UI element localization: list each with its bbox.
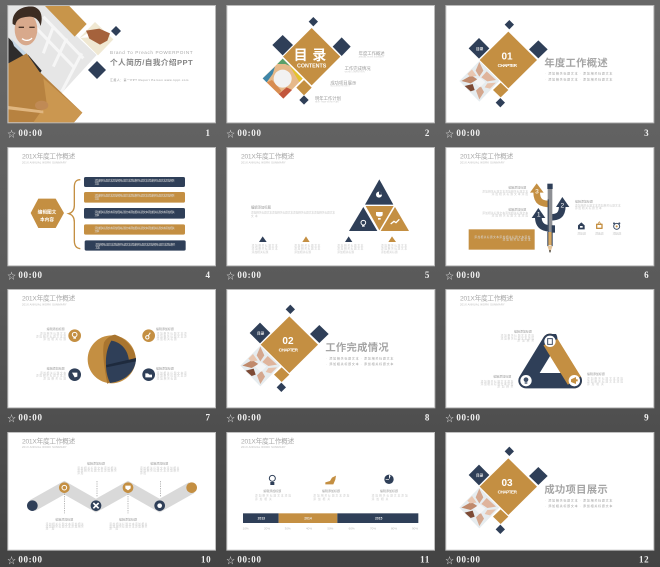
text blocks: 添加相关标题文本添 <box>157 332 187 336</box>
footer: 00:00 <box>237 413 262 423</box>
cover photo: businessman <box>8 6 97 122</box>
small triangles with captions: 添加相关标题文本 <box>252 243 278 247</box>
text blocks: 添加相关标题文本 <box>40 332 66 336</box>
triangle cluster <box>349 179 409 231</box>
gold contents diamond <box>283 28 340 85</box>
footer <box>445 270 649 281</box>
chapter diamonds <box>459 20 548 107</box>
chapter title <box>544 56 612 81</box>
footer: 11 <box>420 555 430 565</box>
arrows around pencil: 3 <box>535 189 539 196</box>
percent scale: 90% <box>412 526 418 530</box>
footer: 7 <box>205 413 211 423</box>
icon circles <box>68 329 155 381</box>
footer: 00:00 <box>456 128 481 138</box>
bars: 添加相关标题文本添加相关标题文本添加相关标题文本添加相关标题文本添加相关 <box>95 179 175 183</box>
footer <box>226 270 430 281</box>
text blocks: 添加相关标题文本添加 <box>501 336 534 340</box>
bars: 添加相关标题文本添加相关标题文本添加相关标题文本添加相关标题文本添加相关 <box>95 226 175 230</box>
dashed connectors <box>64 481 160 513</box>
text blocks: 编辑添加标题 <box>508 184 526 189</box>
text blocks: 添加相关标题文本添 <box>36 374 66 378</box>
heading <box>22 436 76 449</box>
arrows around pencil: 1 <box>537 212 541 219</box>
chapter title: 工作完成情况 <box>325 341 389 354</box>
footer <box>226 555 430 566</box>
footer <box>445 128 649 139</box>
contents list: 明年工作计划 <box>315 95 341 102</box>
chapter diamonds: 01 <box>501 51 513 62</box>
text blocks: 添加相关标题文本添加相关标题文本 <box>482 189 528 193</box>
brace <box>69 180 80 249</box>
footer: ☆ <box>445 556 454 566</box>
gold top diamond <box>45 6 87 37</box>
panel: slide 1 cover <box>7 5 216 139</box>
text blocks: 编辑添加标题 <box>575 199 593 204</box>
handshake photo <box>80 22 113 55</box>
footer: 12 <box>639 555 649 565</box>
text blocks: 添加相关标题文本添加相关 <box>109 522 148 526</box>
small triangles with captions: 添加相关标题 <box>337 250 354 254</box>
footer: 00:00 <box>456 413 481 423</box>
footer <box>7 413 211 424</box>
hexagon: 编辑图文 <box>38 209 57 216</box>
text blocks: 添加 <box>46 527 55 531</box>
text blocks: 添加相关标题文本添加相关 <box>140 469 180 473</box>
chapter title: · 添加相关标题文本 <box>361 355 393 360</box>
panel: slide 9 looped triangle <box>445 289 654 424</box>
text blocks <box>36 326 187 380</box>
small triangles with captions: 添加相关标题文本 <box>294 247 321 251</box>
footer: 2 <box>425 128 430 138</box>
year bar: 2014 <box>304 516 312 520</box>
text blocks: 添加相关标题 <box>43 376 66 380</box>
small triangles with captions <box>252 236 407 254</box>
footer: 00:00 <box>18 128 43 138</box>
captions <box>255 488 408 501</box>
footer <box>226 128 430 139</box>
year bar: 2015 <box>375 516 383 520</box>
bars: 添加相关标题文本添加相关标题文本添加相关标题文本添加相关标题文本添加相关 <box>95 242 176 246</box>
chapter diamonds: 目录 <box>476 473 484 478</box>
chapter diamonds: CHAPTER <box>498 63 518 68</box>
footer: ☆ <box>7 556 16 566</box>
chapter diamonds: 目录 <box>257 331 265 336</box>
captions: 编辑添加标题 <box>380 488 398 493</box>
footer: 00:00 <box>237 270 262 280</box>
sphere chart <box>88 335 136 384</box>
heading: 201X ANNUAL WORK SUMMARY <box>22 161 67 165</box>
footer <box>445 555 649 566</box>
gold text box: 添加相关标题文本 <box>503 238 531 242</box>
hexagon: 本内容 <box>40 216 54 223</box>
text blocks: 添加相关标题文本添 <box>36 334 66 338</box>
small triangles with captions: 添加相关标题 <box>252 250 269 254</box>
pencils photo <box>263 59 303 99</box>
text blocks: 添加相关标题文本添加 <box>492 214 528 218</box>
heading <box>22 294 76 307</box>
chapter diamonds: 目录 <box>476 46 484 51</box>
panel: slide 3 chapter 01 <box>445 5 654 139</box>
chapter title: 成功项目展示 <box>544 483 608 496</box>
bars: 添加相关标题文本添加相关标题文本添加相关标题文本添加相关标题文本添加相关 <box>95 194 175 198</box>
footer: 8 <box>425 413 430 423</box>
text block <box>251 204 335 218</box>
small triangles with captions: 添加相关标题文本 <box>337 247 364 251</box>
footer <box>7 555 211 566</box>
heading: 201X年度工作概述 <box>22 436 76 445</box>
panel: slide 11 year bar <box>226 432 435 566</box>
percent scale: 30% <box>285 526 291 530</box>
text blocks: 编辑添加标题 <box>587 371 605 376</box>
footer <box>7 270 211 281</box>
small triangles with captions: 添加相关标题文本 <box>294 243 321 247</box>
text blocks: 添加相关 <box>587 382 604 386</box>
footer: 00:00 <box>456 555 481 565</box>
footer: 1 <box>205 128 211 138</box>
contents list: 工作完成情况 <box>345 65 371 72</box>
footer: 00:00 <box>18 413 43 423</box>
small triangles with captions: 添加相关标题文本 <box>252 247 278 251</box>
heading <box>460 152 514 165</box>
heading: 201X年度工作概述 <box>460 152 514 161</box>
text blocks: 添加相关标题文本 <box>575 206 602 210</box>
text blocks: 编辑添加标题 <box>514 328 532 333</box>
contents list: NEXT YEAR WORK PLAN <box>315 100 339 103</box>
chapter title: · 添加相关标题文本 <box>545 71 578 76</box>
text blocks <box>482 184 621 218</box>
contents list: 成功项目展示 <box>330 79 357 86</box>
footer: ☆ <box>226 556 235 566</box>
text blocks: 添加相关标题 <box>157 376 177 380</box>
arrows around pencil: 2 <box>560 202 564 209</box>
chapter title: 年度工作概述 <box>544 56 608 69</box>
footer: 9 <box>644 413 649 423</box>
text blocks: 添加相关标题文本添加相关 <box>77 466 117 470</box>
text blocks: 添加相关标题文本添 <box>157 371 187 375</box>
percent scale: 60% <box>349 526 355 530</box>
bars <box>84 177 186 251</box>
heading: 201X ANNUAL WORK SUMMARY <box>241 445 286 449</box>
text blocks: 添加相关标题文本添加 <box>501 334 534 338</box>
text blocks: 添加相关 <box>497 384 514 388</box>
captions: 添加相关标题文本添加 <box>372 494 408 498</box>
captions: 添加相关 <box>372 497 389 501</box>
text blocks: 编辑添加标题 <box>47 365 65 370</box>
icons row: 添加标题 <box>613 232 622 236</box>
text blocks: 添加 <box>109 527 118 531</box>
text blocks: 编辑添加标题 <box>493 374 511 379</box>
heading: 201X年度工作概述 <box>22 294 76 303</box>
text blocks: 编辑添加标题 <box>87 461 105 466</box>
text blocks: 添加相关标题文本添加相关标题文本 <box>575 203 621 207</box>
panel: slide 12 chapter 03 <box>445 432 654 566</box>
footer <box>7 128 211 139</box>
chapter title: · 添加相关标题文本 <box>545 503 578 508</box>
chapter title: · 添加相关标题文本 <box>361 361 393 366</box>
text blocks: 编辑添加标题 <box>55 516 73 521</box>
heading <box>460 294 514 307</box>
captions: 添加相关 <box>255 497 272 501</box>
icons <box>269 475 394 485</box>
text blocks: 添加相关标题文本添加相关 <box>77 469 117 473</box>
footer <box>226 413 430 424</box>
contents list <box>315 50 385 103</box>
text blocks: 添加相关标题文本添加 <box>587 379 623 383</box>
heading: 201X年度工作概述 <box>241 436 295 445</box>
captions: 添加相关 <box>313 497 330 501</box>
footer: ☆ <box>445 414 454 424</box>
bars: 添加相关标题文本添加相关标题文本添加相关标题文本添加相关标题文本添加相关 <box>95 210 175 214</box>
cover title block: Brand To Preach POWERPOINT <box>110 50 193 55</box>
heading: 201X ANNUAL WORK SUMMARY <box>460 303 505 307</box>
footer: 4 <box>205 270 211 280</box>
panel: slide 5 triangles <box>226 147 435 281</box>
percent scale: 80% <box>391 526 397 530</box>
gold text box <box>469 229 535 250</box>
text blocks <box>46 461 180 531</box>
bars: 文本 <box>95 229 100 233</box>
percent scale: 70% <box>370 526 376 530</box>
footer: 00:00 <box>18 555 43 565</box>
chapter title: · 添加相关标题文本 <box>580 71 612 76</box>
zigzag line <box>32 488 192 506</box>
gold contents diamond: 目录 <box>294 47 331 63</box>
bars: 文本 <box>95 213 100 217</box>
heading <box>241 152 295 165</box>
timeline nodes <box>27 482 197 511</box>
chapter diamonds: CHAPTER <box>279 348 299 353</box>
chapter diamonds <box>240 305 329 392</box>
text blocks: 编辑添加标题 <box>508 207 526 212</box>
chapter title: · 添加相关标题文本 <box>580 76 612 81</box>
diamonds <box>272 17 351 105</box>
text blocks: 添加相关标题文本添加 <box>481 379 514 383</box>
cover title block: 汇报人：第一PPT Report Person www.1ppt.com <box>110 77 189 82</box>
footer: 3 <box>644 128 649 138</box>
footer: ☆ <box>7 414 16 424</box>
icon: navy diamonds <box>88 26 121 79</box>
text blocks: 添加相关标题 <box>43 337 66 341</box>
text block: 编辑添加标题 <box>251 204 272 209</box>
small triangles with captions: 添加相关标题 <box>381 250 398 254</box>
captions: 编辑添加标题 <box>263 488 281 493</box>
bars: 文本 <box>95 245 100 249</box>
percent scale <box>243 526 418 530</box>
cover title block: 个人简历/自我介绍PPT <box>110 57 193 67</box>
percent scale: 50% <box>327 526 334 530</box>
heading <box>241 436 295 449</box>
arrows around pencil <box>530 183 569 253</box>
gold contents diamond: CONTENTS <box>297 63 327 69</box>
text blocks: 添加相关标题文本添加 <box>481 382 514 386</box>
icons row: 添加标题 <box>595 232 604 236</box>
text blocks: 添加相关标题文本 <box>40 371 66 375</box>
panel: slide 8 chapter 02 <box>226 289 435 424</box>
chapter title: · 添加相关标题文本 <box>326 361 359 366</box>
panel: slide 6 pencil arrows <box>445 147 654 281</box>
panel: slide 4 hexagon and bars <box>7 147 216 281</box>
chapter diamonds: CHAPTER <box>498 490 518 495</box>
triangle diagram <box>520 334 580 386</box>
footer: ☆ <box>7 129 16 139</box>
contents list: SUCCESS PROJECT <box>330 86 351 88</box>
year bar <box>243 513 418 523</box>
footer: ☆ <box>445 271 454 281</box>
chapter title: · 添加相关标题文本 <box>580 503 612 508</box>
text blocks: 添加相关标题文本添加相关 <box>46 522 84 526</box>
text blocks: 编辑添加标题 <box>150 461 168 466</box>
panel: slide 10 zigzag timeline <box>7 432 216 566</box>
footer <box>445 413 649 424</box>
footer: ☆ <box>226 271 235 281</box>
footer: 6 <box>644 270 649 280</box>
small triangles with captions: 添加相关标题文本 <box>381 247 407 251</box>
chapter title: · 添加相关标题文本 <box>326 355 359 360</box>
footer: ☆ <box>7 271 16 281</box>
icons row: 添加标题 <box>577 232 586 236</box>
chapter diamonds: 03 <box>501 478 513 489</box>
footer: 00:00 <box>237 555 262 565</box>
hexagon <box>31 199 64 228</box>
contents list: 年度工作概述 <box>359 50 385 57</box>
contents list: WORK COMPLETION <box>345 71 365 73</box>
text blocks: 编辑添加标题 <box>156 365 174 370</box>
small triangles with captions: 添加相关标题 <box>294 250 311 254</box>
footer: ☆ <box>226 414 235 424</box>
text block: 添加相关标题文本添加相关标题文本添加相关标题文本添加相关标题文本 <box>251 211 335 215</box>
captions: 编辑添加标题 <box>322 488 340 493</box>
text blocks: 编辑添加标题 <box>47 326 65 331</box>
heading: 201X ANNUAL WORK SUMMARY <box>22 445 67 449</box>
heading: 201X年度工作概述 <box>22 152 76 161</box>
bars: 文本 <box>95 182 100 186</box>
chapter title: · 添加相关标题文本 <box>580 497 612 502</box>
text blocks: 编辑添加标题 <box>156 326 174 331</box>
heading: 201X ANNUAL WORK SUMMARY <box>22 303 67 307</box>
panel: slide 2 contents <box>226 5 435 139</box>
heading: 201X年度工作概述 <box>241 152 295 161</box>
heading: 201X ANNUAL WORK SUMMARY <box>241 161 286 165</box>
small triangles with captions: 添加相关标题文本 <box>381 243 407 247</box>
text blocks: 添加相关标题文本添加相关 <box>46 524 84 528</box>
chapter title: · 添加相关标题文本 <box>545 497 578 502</box>
text blocks: 添加相关 <box>517 339 534 343</box>
footer: ☆ <box>226 129 235 139</box>
text blocks: 添加相关标题文本添加 <box>492 192 528 196</box>
text blocks <box>481 328 623 388</box>
chapter diamonds: 02 <box>282 336 294 347</box>
text blocks: 添加 <box>140 471 146 475</box>
percent scale: 10% <box>243 526 249 530</box>
footer: 00:00 <box>18 270 43 280</box>
chapter title <box>544 483 612 508</box>
text blocks: 添加相关标题文本添加 <box>587 377 623 381</box>
gold overlay <box>8 53 82 122</box>
panel: slide 7 sphere <box>7 289 216 424</box>
footer: 00:00 <box>456 270 481 280</box>
footer: 5 <box>425 270 430 280</box>
text blocks: 添加相关标题文本添 <box>157 334 187 338</box>
chapter diamonds <box>459 447 548 534</box>
footer: ☆ <box>445 129 454 139</box>
text blocks: 添加相关标题文本添加相关标题文本 <box>482 211 528 215</box>
text blocks: 添加相关标题文本添 <box>157 374 187 378</box>
small triangles with captions: 添加相关标题文本 <box>337 243 364 247</box>
percent scale: 20% <box>264 526 270 530</box>
percent scale: 40% <box>306 526 312 530</box>
contents list: ANNUAL WORK SUMMARY <box>359 55 385 58</box>
bars: 文本 <box>95 197 100 201</box>
footer: 10 <box>201 555 211 565</box>
captions: 添加相关标题文本添加 <box>255 494 291 498</box>
heading: 201X ANNUAL WORK SUMMARY <box>460 161 505 165</box>
text block: 文本 <box>251 214 258 218</box>
text blocks: 添加相关标题 <box>157 337 177 341</box>
year bar: 2013 <box>258 516 265 520</box>
heading <box>22 152 76 165</box>
text blocks: 编辑添加标题 <box>119 516 137 521</box>
chapter title: · 添加相关标题文本 <box>545 76 578 81</box>
footer: 00:00 <box>237 128 262 138</box>
icons row <box>577 222 622 236</box>
chapter title <box>325 341 393 366</box>
heading: 201X年度工作概述 <box>460 294 514 303</box>
text blocks: 添加相关标题文本添加相关 <box>109 524 148 528</box>
cover title block <box>110 50 193 82</box>
text blocks: 添加相关标题文本添加相关 <box>140 466 180 470</box>
text blocks: 添加 <box>77 471 84 475</box>
captions: 添加相关标题文本添加 <box>313 494 350 498</box>
gold text box: 添加相关标题文本添加相关标题文本添加 <box>474 235 531 239</box>
